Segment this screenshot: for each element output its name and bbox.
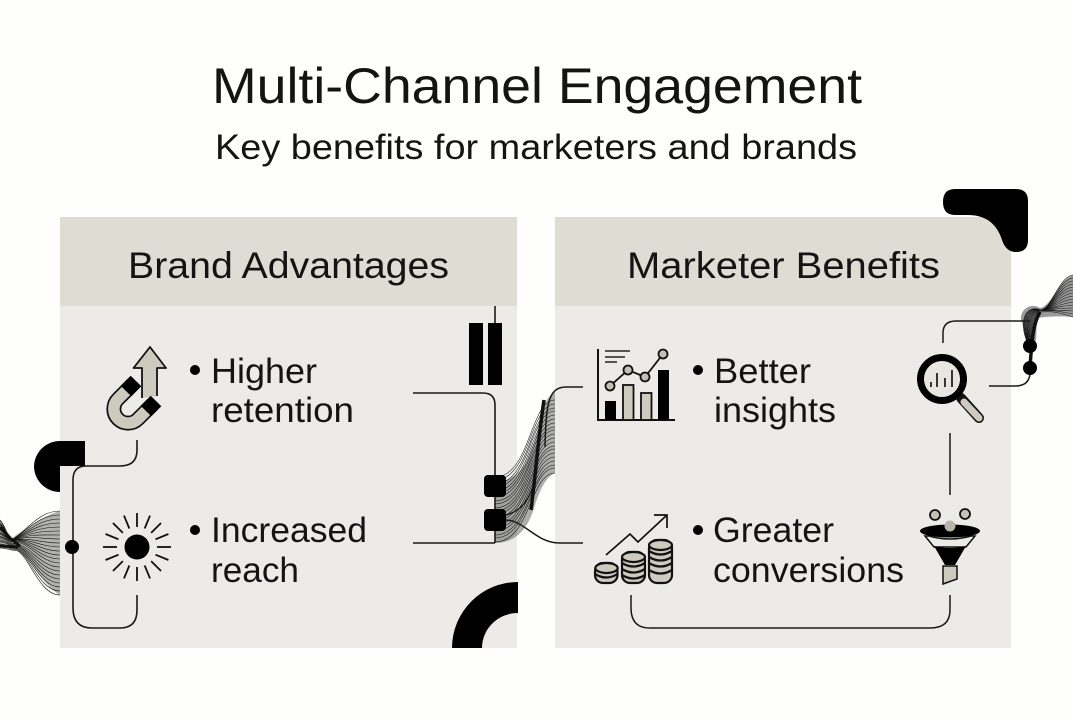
list item: higher retention — [190, 352, 354, 430]
right wave fan — [1021, 275, 1073, 368]
panel: brand advantages background — [60, 217, 517, 648]
connector: right nodes — [1023, 339, 1037, 375]
connector: left panel loop — [73, 440, 137, 628]
connector: centre rail — [413, 306, 495, 543]
list item: increased reach: Increased — [211, 511, 367, 550]
connector: left node — [65, 540, 79, 554]
connector: right panel top — [943, 321, 1030, 386]
decorative shape: top right corner — [943, 189, 1028, 252]
list item: higher retention: retention — [211, 391, 354, 430]
connector: funnel to coins — [631, 595, 950, 628]
icon: magnifying glass — [920, 358, 979, 418]
icon: coin stacks with arrow — [595, 515, 672, 583]
left wave fan — [0, 511, 60, 595]
decorative shape: twin bars — [469, 323, 502, 385]
icon: bar and line chart — [598, 349, 675, 420]
connector: to coins icon — [505, 520, 583, 543]
title: Multi-Channel Engagement — [212, 58, 862, 114]
list item: increased reach — [190, 511, 367, 590]
connector: magnifier to funnel — [949, 433, 951, 495]
decorative shape: bottom arc — [452, 582, 518, 648]
list item: better insights — [693, 352, 836, 430]
subtitle: Key benefits for marketers and brands — [215, 128, 857, 167]
decorative shape: left half round — [34, 441, 85, 492]
list item: increased reach: reach — [211, 551, 299, 590]
connector blocks — [484, 475, 506, 531]
list item: greater conversions: Greater — [713, 511, 834, 550]
list item: greater conversions — [693, 511, 904, 590]
centre wave fan — [495, 392, 555, 543]
icon: sun burst — [103, 513, 171, 581]
list item: higher retention: Higher — [211, 352, 317, 391]
list item: better insights: Better — [714, 352, 811, 391]
icon: magnet with arrow — [114, 347, 166, 423]
panel: marketer benefits background — [555, 217, 1011, 648]
heading: marketer benefits: Marketer Benefits — [627, 245, 940, 286]
connector: to chart icon — [545, 387, 583, 447]
icon: conversion funnel — [920, 509, 980, 584]
list item: better insights: insights — [714, 391, 836, 430]
list item: greater conversions: conversions — [713, 551, 904, 590]
heading: brand advantages: Brand Advantages — [128, 245, 449, 286]
